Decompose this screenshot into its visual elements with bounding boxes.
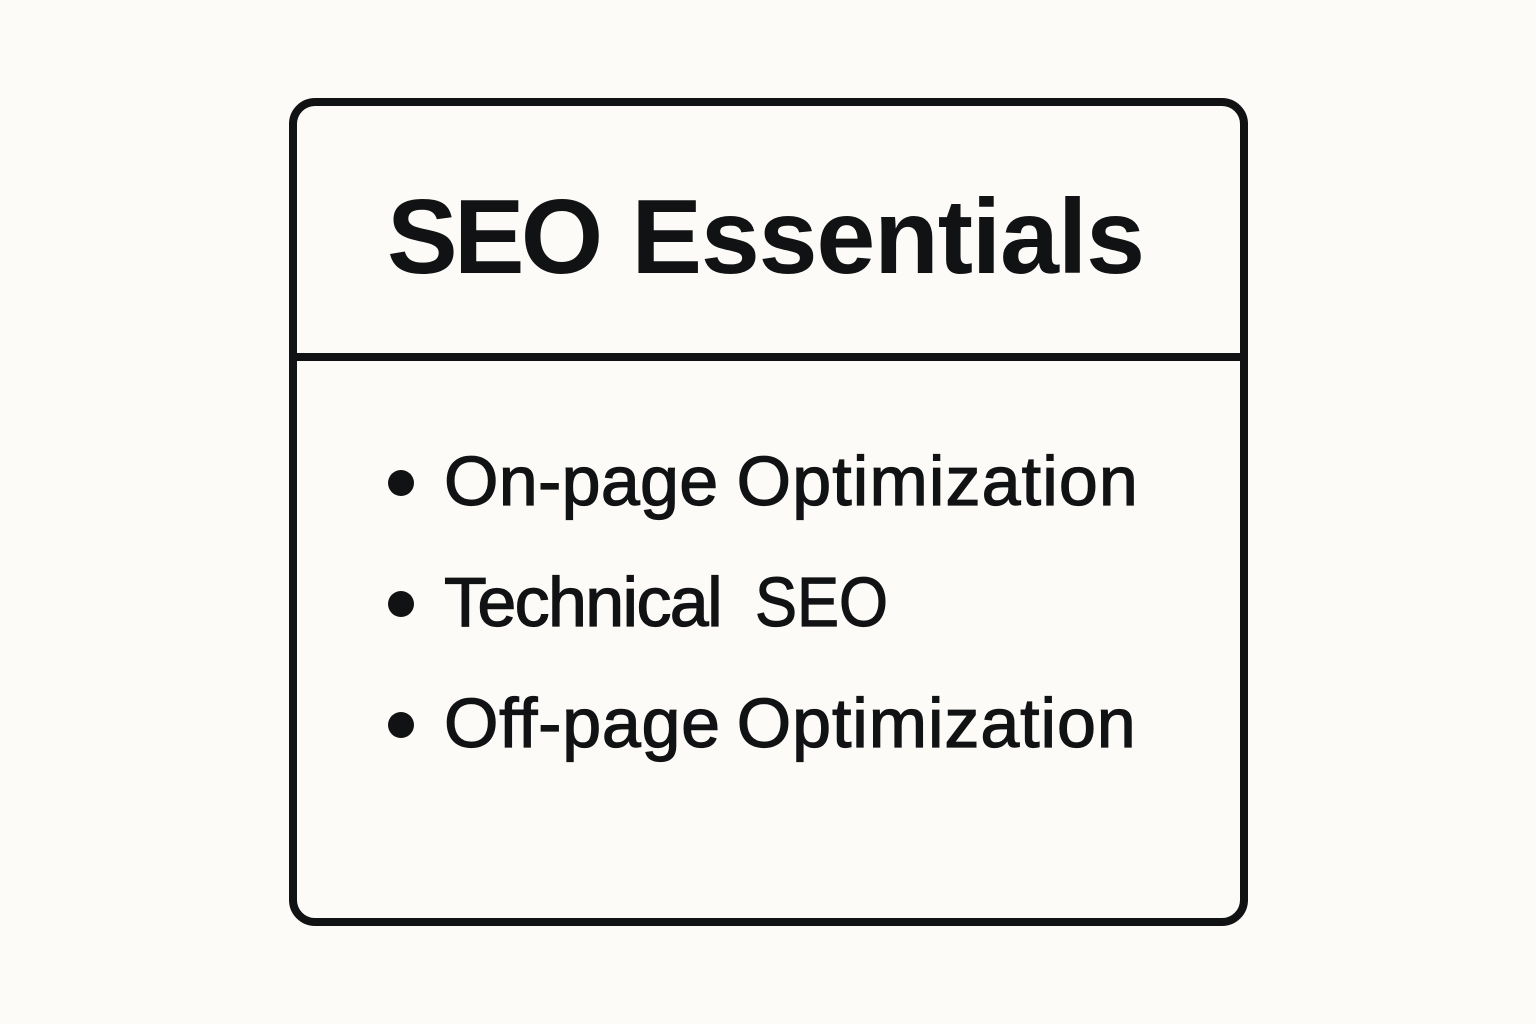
list text (444, 684, 1137, 762)
list text: Optimization (737, 684, 1137, 762)
divider under heading (297, 353, 1240, 361)
list text: On-page (444, 442, 719, 520)
title: Essentials (631, 178, 1144, 296)
list text (444, 563, 888, 641)
list item: Technical SEO (388, 563, 888, 641)
list text: Optimization (737, 442, 1139, 520)
list text (444, 442, 1139, 520)
title (387, 178, 1144, 296)
panel: SEO essentials card (289, 98, 1248, 926)
list item: Off-page Optimization (388, 684, 1137, 762)
bullet icon (388, 712, 414, 738)
bullet icon (388, 591, 414, 617)
list text: Off-page (444, 684, 721, 762)
title: SEO (387, 178, 599, 296)
bullet icon (388, 470, 414, 496)
list text: SEO (755, 563, 888, 641)
list text: Technical (444, 563, 721, 641)
list item: On-page Optimization (388, 442, 1139, 520)
